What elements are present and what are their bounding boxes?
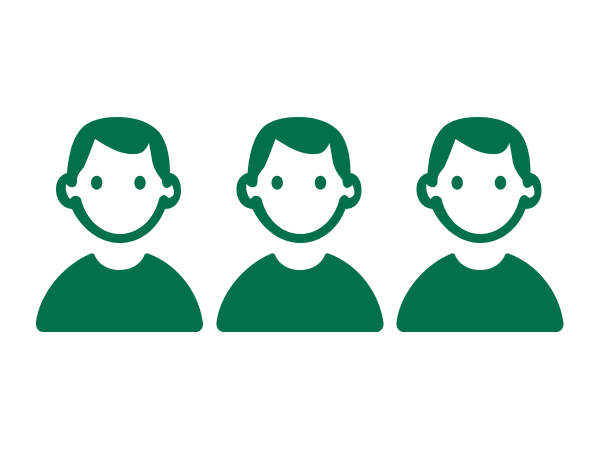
icon: person 3 right eye xyxy=(495,176,506,190)
icon: person 3 left eye xyxy=(452,176,463,190)
icon: person 2 left eye xyxy=(272,176,283,190)
icon: person 1 right eye xyxy=(134,176,146,190)
icon: person 2 right eye xyxy=(315,176,326,190)
icon: person 1 left eye xyxy=(91,176,102,190)
icon: person 3 xyxy=(396,117,564,332)
icon: person 1 xyxy=(36,117,203,332)
icon: person 2 xyxy=(216,117,384,332)
